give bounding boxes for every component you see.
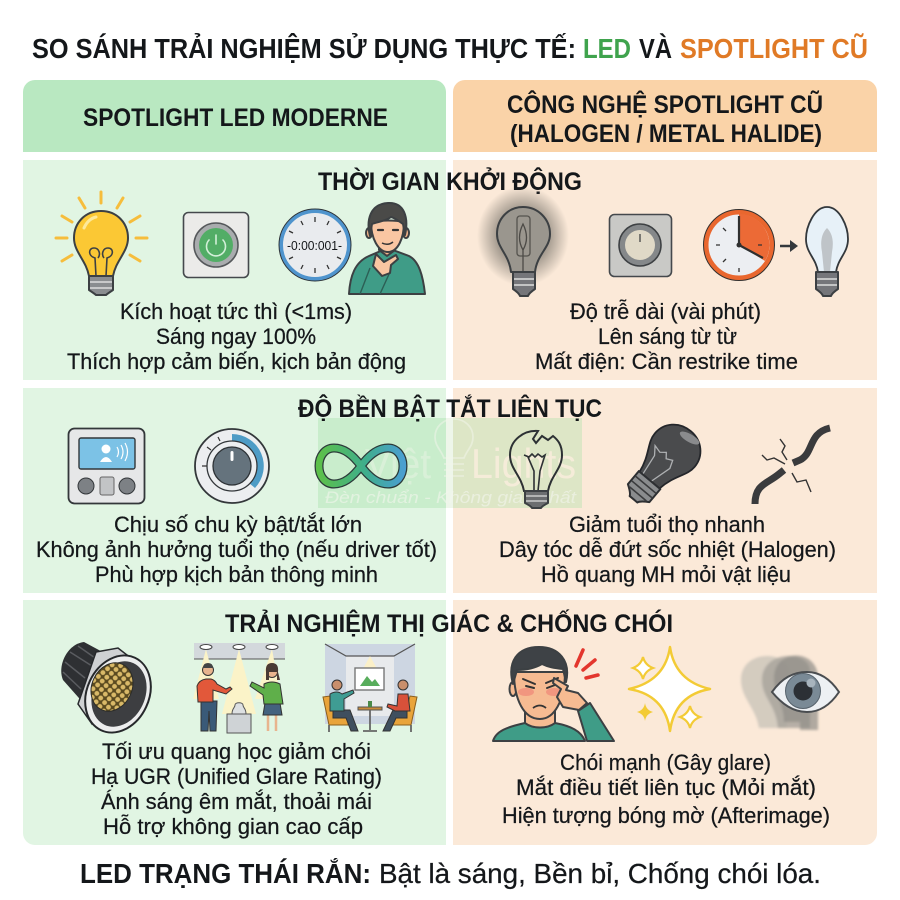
column header: old spotlight: CÔNG NGHỆ SPOTLIGHT CŨ <box>507 89 823 119</box>
icon: slow orange clock <box>704 210 774 280</box>
text: old spotlight durability: Hồ quang MH mỏi vật liệu <box>541 562 791 587</box>
text: old spotlight visual experience: Hiện tượng bóng mờ (Afterimage) <box>502 803 830 828</box>
icon: thinking man <box>349 203 425 294</box>
text: LED visual experience: Hỗ trợ không gian cao cấp <box>103 814 363 839</box>
icon: eye with afterimage <box>741 656 839 730</box>
column header: old spotlight: (HALOGEN / METAL HALIDE) <box>510 120 822 148</box>
text: LED durability: Chịu số chu kỳ bật/tắt lớn <box>114 512 362 537</box>
icon: green power switch <box>184 212 248 278</box>
text: LED visual experience: Ánh sáng êm mắt, thoải mái <box>101 789 372 814</box>
watermark: Lights <box>471 440 576 487</box>
text: old spotlight start-up: Lên sáng từ từ <box>598 324 737 349</box>
text: LED start-up: Thích hợp cảm biến, kịch bản động <box>67 349 406 374</box>
text: old spotlight durability: Giảm tuổi thọ nhanh <box>569 512 765 537</box>
row: switching durability <box>23 388 877 593</box>
icon: burnt black bulb <box>614 414 711 516</box>
text: LED durability: Không ảnh hưởng tuổi thọ (nếu driver tốt) <box>36 537 437 562</box>
icon: glare sparkle star <box>629 647 710 731</box>
text: LED visual experience: Tối ưu quang học giảm chói <box>102 739 371 764</box>
watermark: Việt <box>365 440 431 487</box>
icon: anti-glare LED downlight <box>61 642 163 743</box>
column header: old spotlight <box>453 80 877 152</box>
text: LED durability <box>36 512 437 587</box>
icon: lit clear bulb <box>806 207 848 296</box>
icon: smart control panel <box>68 428 144 504</box>
title: LED <box>583 33 631 64</box>
watermark <box>318 418 582 508</box>
row: visual experience and glare control <box>23 600 877 845</box>
text: old spotlight start-up <box>535 299 798 374</box>
text: LED start-up: Kích hoạt tức thì (<1ms) <box>120 299 352 324</box>
column header: LED: SPOTLIGHT LED MODERNE <box>83 104 388 132</box>
text: LED start-up: Sáng ngay 100% <box>156 324 316 349</box>
footer summary: Bật là sáng, Bền bỉ, Chống chói lóa. <box>379 858 821 889</box>
footer summary <box>80 858 821 889</box>
heading: visual experience: TRẢI NGHIỆM THỊ GIÁC & CHỐNG CHÓI <box>225 608 673 638</box>
text: LED durability: Phù hợp kịch bản thông minh <box>95 562 378 587</box>
text: old spotlight visual experience <box>502 750 830 828</box>
icon: man squinting from glare <box>493 647 614 741</box>
title: SO SÁNH TRẢI NGHIỆM SỬ DỤNG THỰC TẾ: <box>32 32 576 64</box>
footer summary: LED TRẠNG THÁI RẮN: <box>80 858 371 889</box>
watermark: Đèn chuẩn - Không gian chất <box>325 488 577 507</box>
icon: gallery scene <box>193 643 285 733</box>
text: old spotlight durability: Dây tóc dễ đứt sốc nhiệt (Halogen) <box>499 537 836 562</box>
title <box>32 32 868 64</box>
icon: dimmer switch <box>610 214 672 276</box>
text: old spotlight visual experience: Chói mạnh (Gây glare) <box>560 750 771 775</box>
icon: glowing yellow bulb <box>56 192 147 295</box>
icon: rotary dial <box>195 429 269 503</box>
icon: broken filament wire <box>755 428 830 504</box>
row: start-up time <box>23 160 877 380</box>
icon: meeting room scene <box>323 644 417 732</box>
column header: LED <box>23 80 446 152</box>
arrow: warm-up progress <box>780 240 798 252</box>
heading: switching durability: ĐỘ BỀN BẬT TẮT LIÊN TỤC <box>298 393 602 423</box>
text: old spotlight start-up: Độ trễ dài (vài phút) <box>570 299 761 324</box>
icon: cracked bulb <box>510 431 562 508</box>
icon: stopwatch clock <box>279 209 351 281</box>
text: LED start-up <box>67 299 406 374</box>
text: old spotlight visual experience: Mắt điều tiết liên tục (Mỏi mắt) <box>516 775 816 800</box>
text: LED visual experience <box>91 739 382 839</box>
title: VÀ <box>639 33 672 64</box>
text: old spotlight start-up: Mất điện: Cần restrike time <box>535 349 798 374</box>
text: LED visual experience: Hạ UGR (Unified Glare Rating) <box>91 764 382 789</box>
icon: stopwatch clock: -0:00:001- <box>287 238 342 253</box>
text: old spotlight durability <box>499 512 836 587</box>
title: SPOTLIGHT CŨ <box>680 33 868 64</box>
icon: dim halogen bulb <box>477 186 569 296</box>
icon: infinity loop <box>319 448 403 484</box>
heading: start-up time: THỜI GIAN KHỞI ĐỘNG <box>318 166 582 196</box>
